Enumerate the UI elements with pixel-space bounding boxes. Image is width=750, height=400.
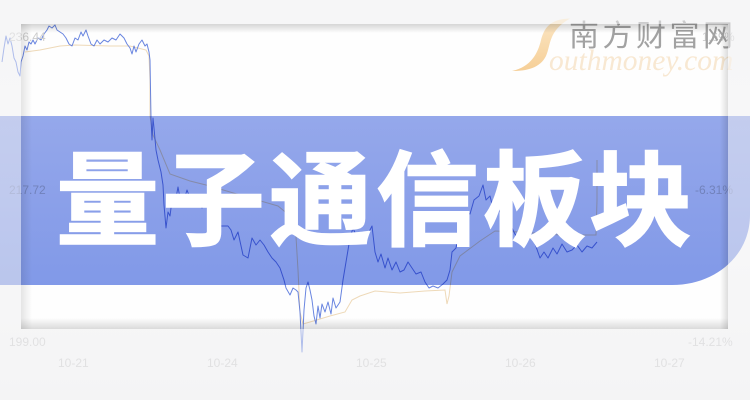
date label 10-21: 10-21 [58,356,89,370]
title character 量: 量 [56,144,159,259]
inner framed panel [21,24,728,329]
date label 10-25: 10-25 [356,356,387,370]
blue title band [0,116,750,285]
logo Chinese name: 南方财富网 [569,20,736,53]
title character 子: 子 [162,144,265,259]
title character 通: 通 [269,144,372,259]
title character 块: 块 [589,144,692,259]
right axis bottom value: -14.21% [688,335,733,349]
blue price line [2,25,597,352]
frame inner shadow [21,24,728,329]
date label 10-26: 10-26 [505,356,536,370]
logo Latin name: outhmoney.com [549,45,733,77]
left axis middle value: 217.72 [9,183,46,197]
date label 10-27: 10-27 [654,356,685,370]
logo: southmoney watermark [512,18,736,77]
icon: orange swoosh [512,18,570,71]
left axis bottom value: 199.00 [9,335,46,349]
line chart: price and average lines [2,25,597,352]
title character 信: 信 [376,144,479,259]
right axis top value: 1.69% [702,32,735,44]
average price line [25,45,597,324]
date label 10-24: 10-24 [207,356,238,370]
title: 量子通信板块 [56,144,692,259]
title character 板: 板 [483,144,586,259]
right axis middle value: -6.31% [695,183,733,197]
left axis top value: 236.44 [9,30,46,44]
